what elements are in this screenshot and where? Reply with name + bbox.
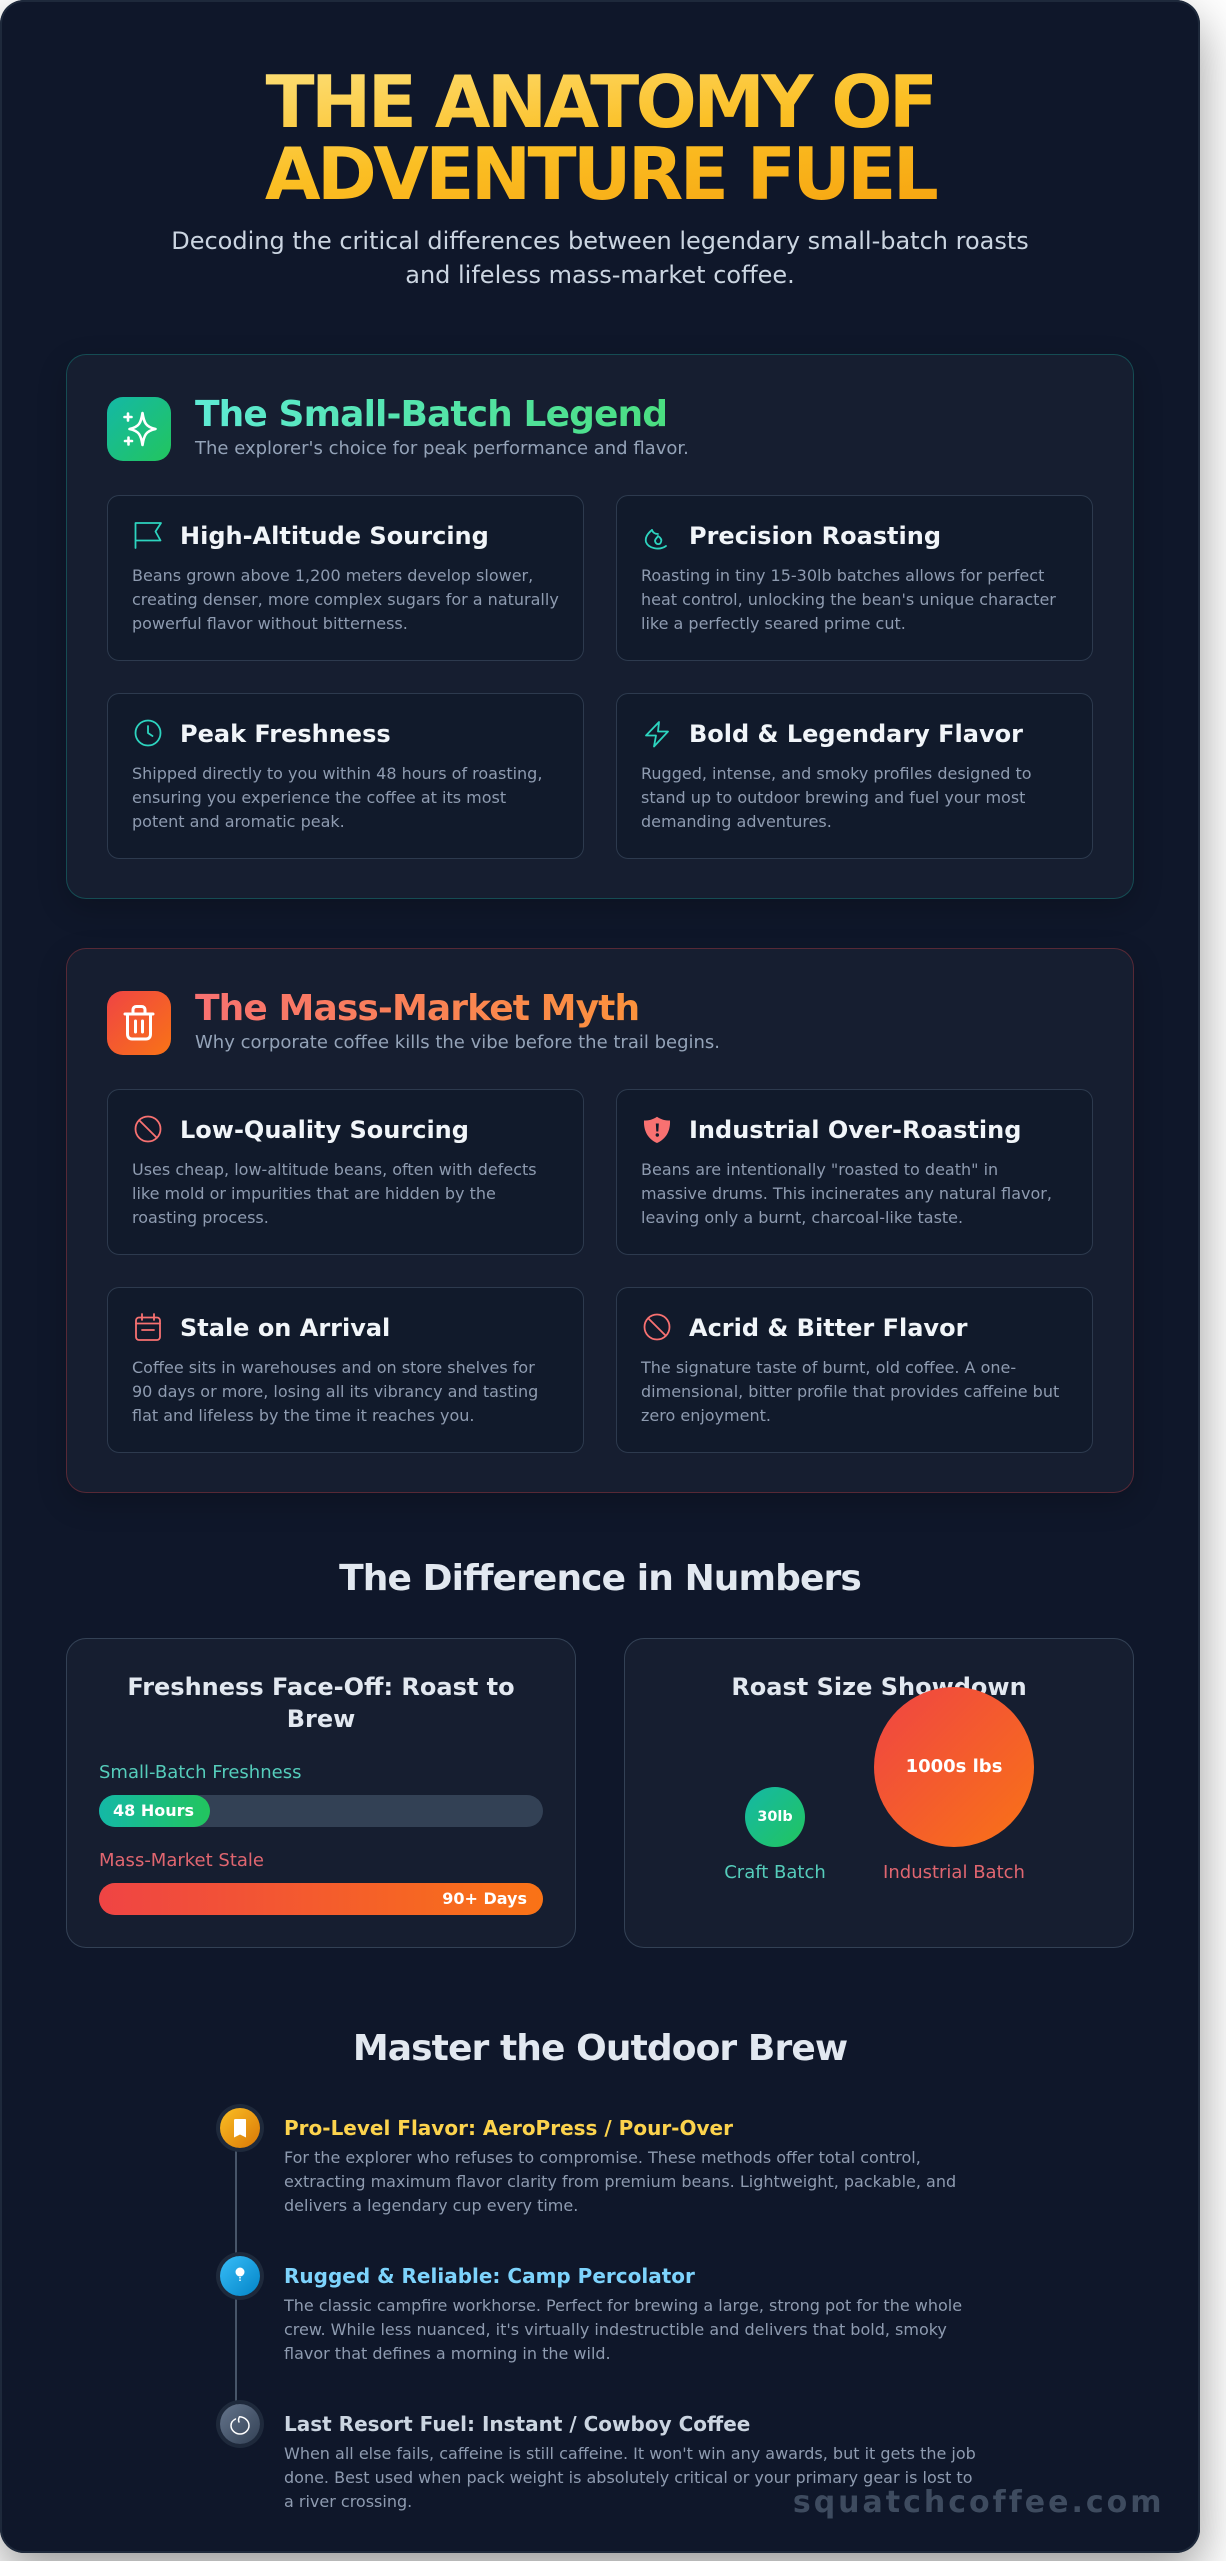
timeline connector [235, 2144, 237, 2408]
card text: Beans grown above 1,200 meters develop slower, [132, 566, 533, 585]
card text [132, 1160, 537, 1227]
subtitle: and lifeless mass-market coffee. [405, 261, 795, 289]
subtitle: Decoding the critical differences between legendary small-batch roasts [171, 227, 1029, 255]
icon: ban [134, 1116, 162, 1142]
card text [641, 1160, 1052, 1227]
circle: industrial batch: 1000s lbs [906, 1756, 1002, 1777]
card text [640, 1358, 1059, 1425]
step text: For the explorer who refuses to compromise. These methods offer total control, [284, 2148, 921, 2167]
label: mass-market stale: Mass-Market Stale [99, 1850, 264, 1871]
card title: High-Altitude Sourcing [180, 522, 489, 550]
card text [641, 566, 1056, 633]
card text: powerful flavor without bitterness. [132, 614, 408, 633]
panel: small-batch legend [66, 354, 1134, 899]
panel subtitle: The explorer's choice for peak performance and flavor. [195, 438, 689, 459]
icon: ban [644, 1314, 670, 1340]
icon: shield [644, 1116, 670, 1143]
step text [284, 2296, 962, 2363]
subtitle [171, 227, 1029, 289]
step text [284, 2148, 956, 2215]
circle: craft batch 30lb: 30lb [757, 1809, 793, 1825]
bar: small-batch 48 hours [99, 1795, 543, 1827]
card text: roasting process. [132, 1208, 269, 1227]
card text: The signature taste of burnt, old coffee. A one- [641, 1358, 1016, 1377]
step title: Rugged & Reliable: Camp Percolator [284, 2264, 695, 2288]
icon: flag [134, 522, 162, 549]
icon: bulb [220, 2256, 260, 2296]
card text: stand up to outdoor brewing and fuel your most [641, 788, 1025, 807]
title [66, 66, 1134, 210]
card text: dimensional, bitter profile that provides caffeine but [641, 1382, 1059, 1401]
bar: mass-market 90+ days [99, 1883, 543, 1915]
card text: ensuring you experience the coffee at its most [132, 788, 506, 807]
card: stale on arrival [107, 1287, 584, 1453]
card title: Bold & Legendary Flavor [689, 720, 1023, 748]
watermark: squatchcoffee.com [793, 2485, 1164, 2520]
card text [641, 764, 1032, 831]
card: high-altitude sourcing [107, 495, 584, 661]
card text: heat control, unlocking the bean's unique character [641, 590, 1056, 609]
card text: zero enjoyment. [641, 1406, 771, 1425]
card text: Rugged, intense, and smoky profiles designed to [641, 764, 1032, 783]
icon: clock [134, 720, 162, 746]
chart title: Brew [287, 1705, 355, 1733]
bar fill [99, 1883, 543, 1915]
card text: 90 days or more, losing all its vibrancy and tasting [132, 1382, 538, 1401]
card text: Uses cheap, low-altitude beans, often with defects [132, 1160, 537, 1179]
chart title: Freshness Face-Off: Roast to [127, 1673, 515, 1701]
icon: trash can [107, 991, 171, 1055]
bar fill: 48 Hours [113, 1801, 194, 1820]
card text: massive drums. This incinerates any natural flavor, [641, 1184, 1052, 1203]
card title: Precision Roasting [689, 522, 941, 550]
label: craft batch: Craft Batch [724, 1862, 826, 1883]
card title: Industrial Over-Roasting [689, 1116, 1021, 1144]
step: camp percolator [216, 2252, 962, 2363]
card: industrial over-roasting [616, 1089, 1093, 1255]
card text: creating denser, more complex sugars for a naturally [132, 590, 559, 609]
icon: sparkles [107, 397, 171, 461]
card: peak freshness [107, 693, 584, 859]
circle: craft batch 30lb [745, 1787, 805, 1847]
step text [284, 2444, 976, 2511]
card: bold and legendary flavor [616, 693, 1093, 859]
icon: lightning bolt [645, 721, 669, 748]
bar fill [99, 1795, 210, 1827]
step text: flavor that defines a morning in the wild. [284, 2344, 611, 2363]
step text: crew. While less nuanced, it's virtually indestructible and delivers that bold, smoky [284, 2320, 947, 2339]
card text: flat and lifeless by the time it reaches you. [132, 1406, 474, 1425]
step text: When all else fails, caffeine is still caffeine. It won't win any awards, but it gets the job [284, 2444, 976, 2463]
card text: Beans are intentionally "roasted to death" in [641, 1160, 998, 1179]
card title: Acrid & Bitter Flavor [689, 1314, 967, 1342]
step title: Pro-Level Flavor: AeroPress / Pour-Over [284, 2116, 733, 2140]
card title: Low-Quality Sourcing [180, 1116, 469, 1144]
card text [132, 764, 542, 831]
chart title [127, 1673, 515, 1733]
timeline: brewing methods [216, 2104, 976, 2511]
card: precision roasting [616, 495, 1093, 661]
step text: a river crossing. [284, 2492, 412, 2511]
step title: Last Resort Fuel: Instant / Cowboy Coffee [284, 2412, 750, 2436]
card text: like a perfectly seared prime cut. [641, 614, 906, 633]
title: THE ANATOMY OF [266, 60, 934, 144]
card text: leaving only a burnt, charcoal-like taste. [641, 1208, 963, 1227]
panel: mass-market myth [66, 948, 1134, 1493]
card text: like mold or impurities that are hidden by the [132, 1184, 496, 1203]
bar fill: 90+ Days [442, 1889, 527, 1908]
icon: flame [644, 529, 667, 550]
heading: the difference in numbers: The Difference in Numbers [339, 1558, 861, 1598]
heading: master the outdoor brew: Master the Outdoor Brew [353, 2028, 847, 2068]
label: industrial batch: Industrial Batch [883, 1862, 1025, 1883]
card: low-quality sourcing [107, 1089, 584, 1255]
step: instant cowboy coffee [216, 2400, 976, 2511]
card text: demanding adventures. [641, 812, 832, 831]
card text [132, 1358, 538, 1425]
step text: The classic campfire workhorse. Perfect for brewing a large, strong pot for the whole [284, 2296, 962, 2315]
chart: roast size showdown [624, 1638, 1134, 1948]
step text: done. Best used when pack weight is absolutely critical or your primary gear is lost to [284, 2468, 972, 2487]
icon: bookmark [220, 2108, 260, 2148]
card title: Peak Freshness [180, 720, 391, 748]
title: ADVENTURE FUEL [265, 132, 935, 216]
icon: bean outline [220, 2404, 260, 2444]
card text: Roasting in tiny 15-30lb batches allows for perfect [641, 566, 1044, 585]
label: small-batch freshness: Small-Batch Freshness [99, 1762, 301, 1783]
card text: Coffee sits in warehouses and on store shelves for [132, 1358, 535, 1377]
icon: calendar [135, 1313, 161, 1341]
card title: Stale on Arrival [180, 1314, 390, 1342]
card text: potent and aromatic peak. [132, 812, 345, 831]
chart: freshness face-off [66, 1638, 576, 1948]
step text: extracting maximum flavor clarity from premium beans. Lightweight, packable, and [284, 2172, 956, 2191]
chart title: Roast Size Showdown [731, 1673, 1027, 1701]
panel subtitle: Why corporate coffee kills the vibe before the trail begins. [195, 1032, 720, 1053]
card text: Shipped directly to you within 48 hours of roasting, [132, 764, 542, 783]
step: aeropress pour-over [216, 2104, 956, 2215]
heading: small-batch legend: The Small-Batch Legend [195, 394, 667, 435]
step text: delivers a legendary cup every time. [284, 2196, 578, 2215]
heading: mass-market myth: The Mass-Market Myth [195, 988, 639, 1029]
card text [132, 566, 559, 633]
card: acrid and bitter flavor [616, 1287, 1093, 1453]
circle: industrial batch [874, 1687, 1034, 1847]
